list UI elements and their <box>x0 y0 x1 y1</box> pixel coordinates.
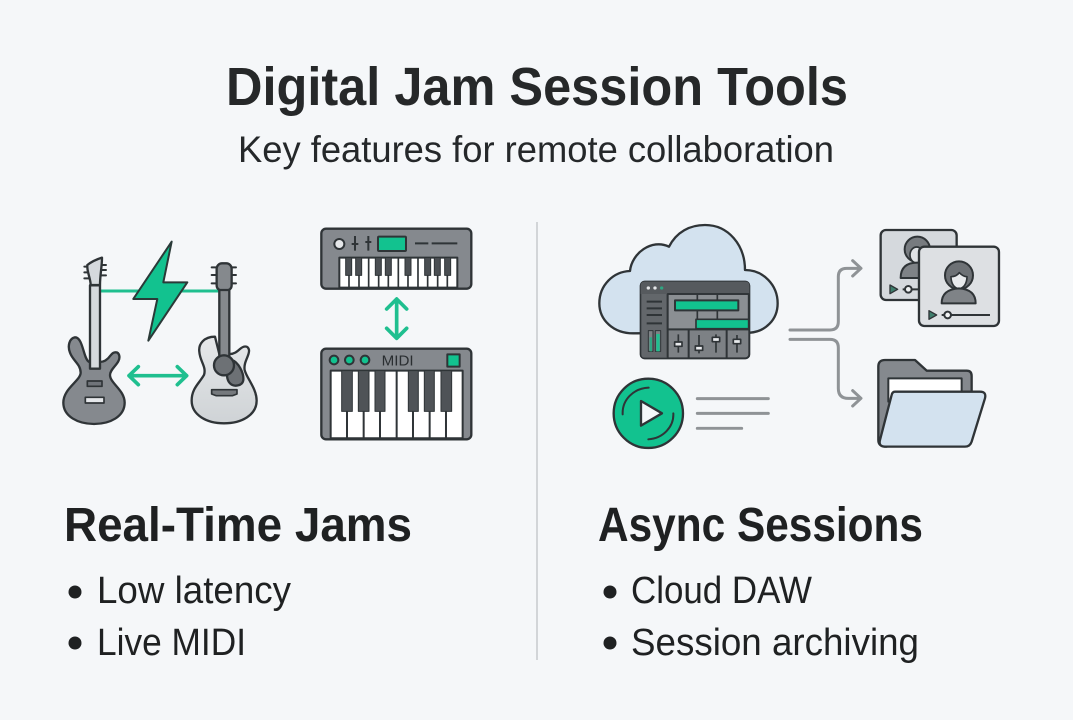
icon: electric and acoustic guitars with lightning link <box>63 242 257 424</box>
DAW window <box>641 282 749 358</box>
right bullet list: Cloud DAW <box>631 570 812 612</box>
right column heading: Async Sessions <box>598 499 923 552</box>
green connection line <box>100 286 220 295</box>
icon: open folder <box>878 360 985 447</box>
top synth keyboard <box>321 229 471 289</box>
left column heading: Real-Time Jams <box>64 499 412 552</box>
right bullet list <box>604 570 919 664</box>
right bullet list: Session archiving <box>631 622 919 664</box>
arrow: vertical two-way <box>387 299 407 338</box>
back video card <box>881 230 957 300</box>
icon: play button <box>614 379 683 448</box>
icon: cloud DAW and audio player <box>599 225 778 448</box>
MIDI controller <box>321 349 471 439</box>
cloud <box>599 225 778 333</box>
left bullet list: Live MIDI <box>97 622 246 664</box>
left bullet list <box>68 570 291 664</box>
text placeholder lines <box>697 399 768 428</box>
arrow: to video cards <box>790 261 861 330</box>
icon: electric guitar <box>63 258 125 424</box>
icon: MIDI keyboards <box>321 229 471 439</box>
left bullet list: Low latency <box>97 570 291 612</box>
front video card <box>919 247 999 326</box>
arrow: to folder <box>790 339 861 406</box>
icon: acoustic guitar <box>192 263 257 423</box>
icon: lightning bolt <box>133 242 187 341</box>
title: Digital Jam Session Tools <box>226 57 848 117</box>
MIDI controller: MIDI <box>382 353 414 369</box>
icon: routing arrows, video cards and folder <box>790 230 999 447</box>
arrow: two-way between guitars <box>129 367 187 385</box>
subtitle: Key features for remote collaboration <box>238 129 834 170</box>
